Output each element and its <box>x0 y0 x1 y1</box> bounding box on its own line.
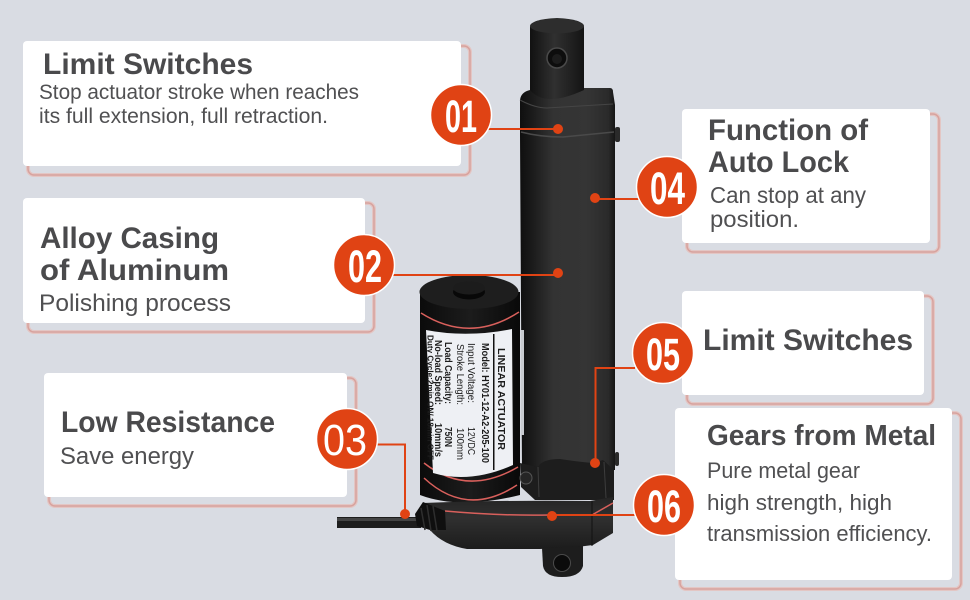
motor label <box>426 329 513 477</box>
heading: Alloy Casing <box>40 222 219 255</box>
motor label: 100mm <box>454 428 466 460</box>
badge 04: 04 <box>650 163 685 214</box>
leader line 01 <box>488 124 563 134</box>
badge 02: 02 <box>348 241 382 292</box>
heading: Auto Lock <box>708 146 849 179</box>
panel: gears from metal <box>675 408 961 589</box>
heading <box>40 222 229 287</box>
heading: Function of <box>708 114 869 147</box>
outer casing <box>520 88 620 470</box>
description: Save energy <box>60 443 194 470</box>
badge 01: 01 <box>445 91 477 142</box>
rod <box>530 18 584 108</box>
motor label: 750N <box>442 427 454 447</box>
badge 05 <box>632 322 694 384</box>
description: Can stop at any <box>710 182 866 208</box>
motor <box>420 275 520 502</box>
leader line 03 <box>376 444 410 519</box>
motor label: Input Voltage: <box>465 343 477 403</box>
badge 03 <box>316 408 378 470</box>
badge 05: 05 <box>646 329 680 380</box>
description: Polishing process <box>39 290 231 317</box>
badge 06: 06 <box>647 481 681 532</box>
heading: Limit Switches <box>43 48 253 81</box>
description: Pure metal gear <box>707 458 860 483</box>
motor label: 10mm/s <box>432 423 444 457</box>
heading: of Aluminum <box>40 254 229 287</box>
motor label: Load Capacity: <box>442 342 454 404</box>
heading: Limit Switches <box>703 324 913 357</box>
panel: low resistance <box>44 373 356 506</box>
bottom mount <box>542 546 583 577</box>
badge 01 <box>430 84 492 146</box>
motor label: LINEAR ACTUATOR <box>495 348 507 450</box>
motor label: Stroke Length: <box>454 344 466 405</box>
heading: Gears from Metal <box>707 420 936 452</box>
description: position. <box>710 206 799 232</box>
description <box>707 458 932 546</box>
description: transmission efficiency. <box>707 521 932 546</box>
motor label: Model: HY01-12-A2-205-100 <box>479 343 491 463</box>
leader line 02 <box>390 268 563 278</box>
leader line 04 <box>590 193 640 203</box>
badge 06 <box>634 474 694 536</box>
description: Stop actuator stroke when reaches <box>39 81 359 104</box>
heading <box>708 114 869 179</box>
badge 02 <box>334 234 394 296</box>
leader line 06 <box>547 511 640 521</box>
description <box>710 182 866 232</box>
panel: limit switches right <box>682 291 933 404</box>
strain relief <box>415 502 446 531</box>
description: high strength, high <box>707 490 892 515</box>
base <box>423 497 613 549</box>
actuator product photo <box>337 18 620 577</box>
panel: auto lock <box>682 109 939 252</box>
motor label: No-load Speed: <box>432 340 444 405</box>
leader line 05 <box>590 368 635 468</box>
clamp <box>520 459 614 500</box>
panel: alloy casing <box>23 198 374 332</box>
motor label: 12VDC <box>465 427 477 455</box>
cable <box>337 517 421 528</box>
heading: Low Resistance <box>61 406 275 439</box>
motor label: Duty Cycle:2min ON/ 18min OFF <box>426 335 436 460</box>
description <box>39 81 359 128</box>
badge 04 <box>636 156 698 218</box>
description: its full extension, full retraction. <box>39 105 328 128</box>
panel: limit switches top <box>23 41 470 175</box>
badge 03: 03 <box>323 416 367 465</box>
